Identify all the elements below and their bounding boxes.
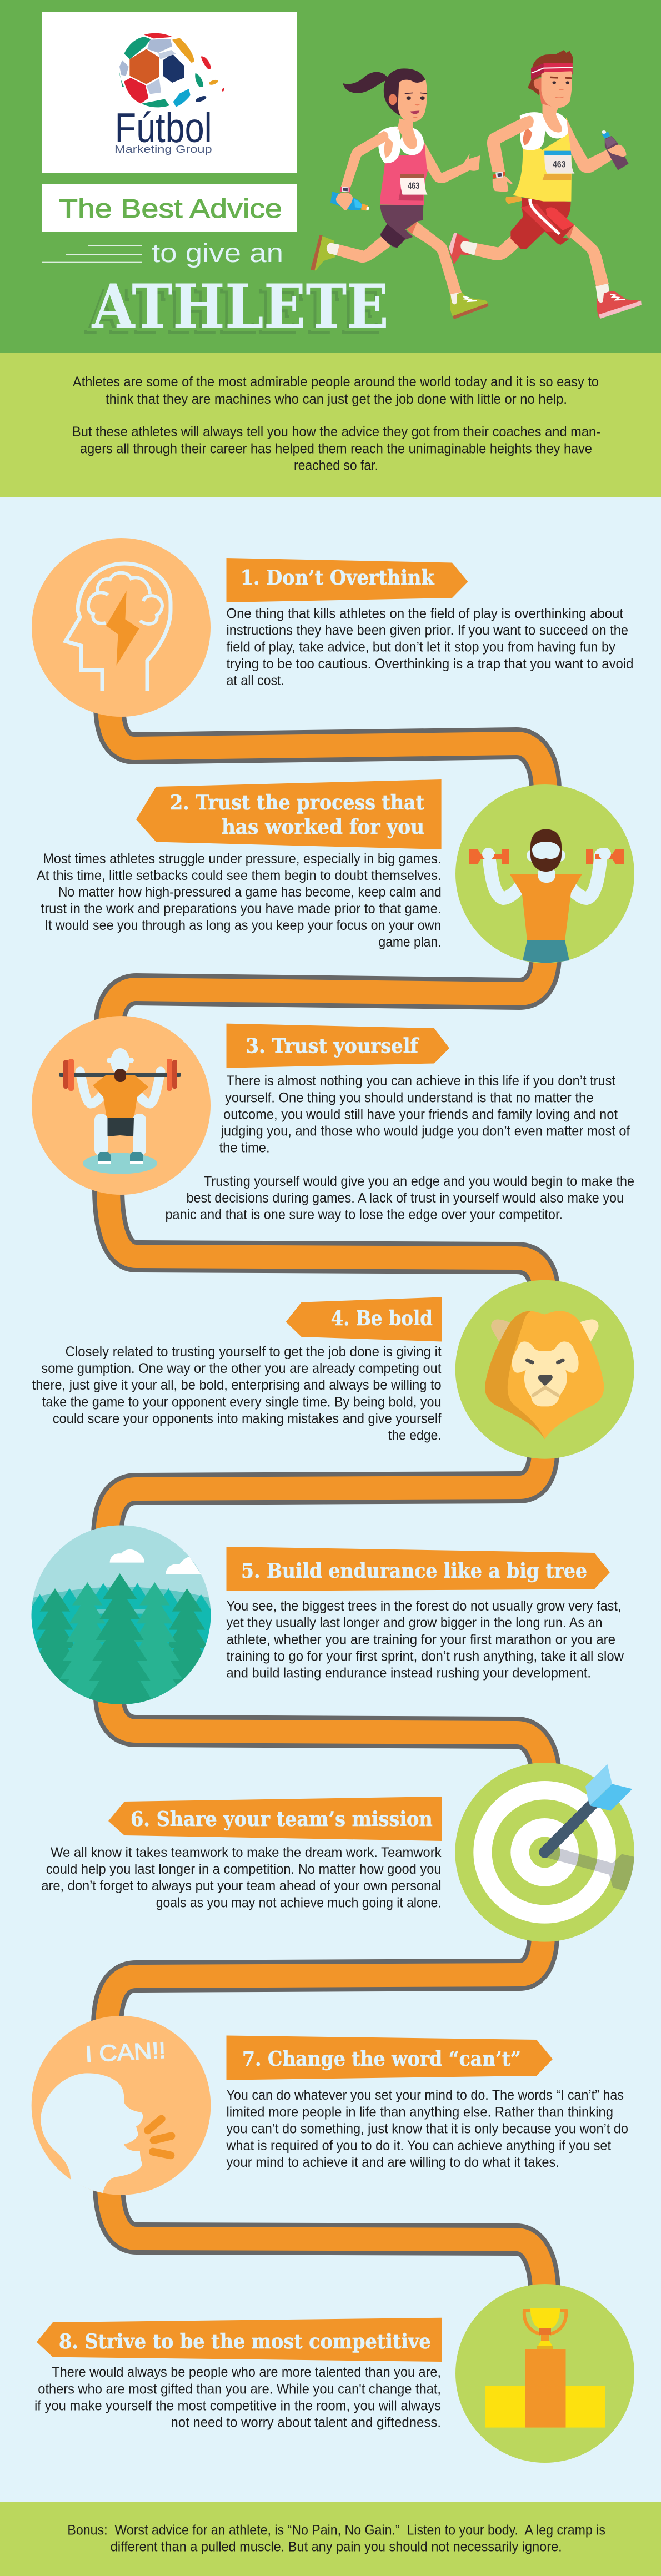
body text 7: You can do whatever you set your mind to do. The words “I can’t” has [227,2087,624,2103]
section 3 [166,1024,634,1222]
bonus panel: different than a pulled muscle. But any pain you should not necessarily ignore. [111,2539,562,2555]
banner: Share your team's mission [108,1797,442,1841]
body text 1: at all cost. [227,673,284,688]
icon: brain [32,538,211,717]
banner: Trust yourself [227,1024,449,1068]
body text 7: what is required of you to do it. You can achieve anything if you set [226,2138,611,2154]
body text 7: your mind to achieve it and are willing to do what it takes. [227,2155,559,2170]
banner: Share your team's mission: 6. Share your team’s mission [131,1808,433,1831]
banner: Trust the process: has worked for you [222,816,424,839]
banner: Don't Overthink: 1. Don’t Overthink [241,566,435,590]
banner: Don't Overthink [227,558,468,602]
body text 5: and build lasting endurance instead rushing your development. [227,1666,591,1681]
section 8 [34,2318,442,2431]
body text 5: You see, the biggest trees in the forest do not usually grow very fast, [227,1598,621,1614]
icon: dumbbell man [455,784,634,963]
title line: ATHLETE: ATHLETE [87,274,384,346]
body text 6: We all know it takes teamwork to make the dream work. Teamwork [51,1845,442,1860]
body text 6 [41,1845,442,1910]
section 1 [227,558,633,688]
logo card: Fútbol [115,104,212,151]
runner: man [449,50,642,319]
body text 3: There is almost nothing you can achieve in this life if you don’t trust [227,1073,615,1089]
body text 5: yet they usually last longer and grow bigger in the long run. As an [227,1615,602,1631]
body text 4: could scare your opponents into making mistakes and give yourself [53,1411,442,1427]
body text 3: yourself. One thing you should understand is that no matter the [225,1090,593,1105]
banner: Build endurance: 5. Build endurance like a big tree [241,1559,587,1583]
body text 1: One thing that kills athletes on the field of play is overthinking about [227,606,623,622]
runner: woman: 463 [408,180,419,191]
body text 3: Trusting yourself would give you an edge and you would begin to make the [204,1174,634,1189]
section 7 [226,2035,628,2170]
runner: man: 463 [553,159,566,169]
title line: The Best Advice: The Best Advice [59,194,282,224]
body text 6: are, don’t forget to always put your team ahead of your own personal [41,1878,442,1894]
body text 5 [227,1598,624,1681]
body text 5: training to go for your first sprint, don’t rush anything, take it all slow [227,1649,624,1664]
banner: Build endurance [227,1547,610,1591]
body text 7: you can’t do something, just know that it is only because you won’t do [227,2121,628,2136]
body text 4: Closely related to trusting yourself to get the job done is giving it [66,1344,442,1360]
title line: The Best Advice [42,184,297,232]
intro panel: reached so far. [294,457,378,473]
connector path 1 to 2 [109,705,545,791]
body text 3 [166,1073,634,1222]
banner: Trust the process [136,779,442,849]
connector path 7 to 8 [109,2185,544,2293]
intro panel: Athletes are some of the most admirable people around the world today and it is so easy to [73,374,599,390]
logo card [42,12,297,173]
banner: Change the word can't: 7. Change the word “can’t” [242,2047,521,2071]
connector path 6 to 7 [107,1935,543,2024]
connector path 5 to 6 [109,1696,545,1774]
title line: to give an [42,239,283,268]
body text 4: there, just give it your all, be bold, enterprising and always be willing to [32,1377,442,1393]
page background [0,497,661,2502]
icon: forest [31,1525,211,1704]
body text 7: limited more people in life than anything else. Rather than thinking [227,2104,613,2120]
section 2 [37,779,442,950]
title line: to give an: to give an [152,239,283,268]
runners illustration [311,50,642,319]
body text 4 [32,1344,442,1443]
body text 4: take the game to your opponent every single time. By being bold, you [42,1394,442,1410]
body text 1: instructions they have been given prior. If you want to succeed on the [227,623,628,638]
body text 4: the edge. [388,1428,442,1443]
connector path 2 to 3 [110,955,545,1024]
body text 3: panic and that is one sure way to lose the edge over your competitor. [166,1207,563,1222]
intro panel [0,353,661,497]
intro panel: agers all through their career has helped them reach the unimaginable heights they have [80,441,592,456]
banner: Trust yourself: 3. Trust yourself [246,1035,419,1058]
icon: speaking head [32,2016,211,2195]
runner: woman [311,68,488,319]
body text 8: others who are most gifted than you are. While you can't change that, [38,2381,441,2397]
icon: lion [455,1280,634,1459]
logo card: Marketing Group [114,143,212,155]
body text 8: not need to worry about talent and giftedness. [171,2415,441,2431]
bonus panel [0,2502,661,2576]
intro panel: But these athletes will always tell you how the advice they got from their coaches and man- [72,424,600,440]
body text 3: best decisions during games. A lack of trust in yourself would also make you [187,1190,624,1206]
body text 5: athlete, whether you are training for your first marathon or you are [227,1632,615,1647]
header panel [0,0,661,353]
banner: Strive to be the most competitive: 8. Strive to be the most competitive [59,2330,431,2353]
section 4 [32,1297,442,1443]
connector path 4 to 5 [107,1452,543,1535]
body text 2: It would see you through as long as you keep your focus on your own [44,918,441,933]
body text 2 [37,851,442,950]
body text 4: some gumption. One way or the other you are already competing out [41,1361,441,1376]
body text 3: the time. [219,1140,270,1156]
banner: Be bold [286,1297,442,1341]
body text 8: There would always be people who are more talented than you are, [52,2364,441,2380]
body text 2: Most times athletes struggle under pressure, especially in big games. [43,851,441,867]
body text 2: game plan. [379,934,441,950]
body text 8: if you make yourself the most competitive in the room, you will always [34,2398,441,2414]
body text 2: No matter how high-pressured a game has become, keep calm and [58,884,442,900]
body text 1 [227,606,633,688]
icon: speaking head: I CAN!! [84,2037,166,2067]
body text 1: field of play, take advice, but don’t let it stop you from having fun by [227,640,615,655]
body text 6: could help you last longer in a competition. No matter how good you [46,1861,442,1877]
banner: Be bold: 4. Be bold [331,1307,433,1330]
icon: trophy podium [455,2284,634,2463]
intro panel: think that they are machines who can just get the job done with little or no help. [106,391,567,407]
body text 6: goals as you may not achieve much going it alone. [156,1895,442,1910]
title line: ATHLETE: ATHLETE [84,276,382,349]
body text 3: outcome, you would still have your friends and family loving and not [223,1107,618,1123]
connector path 3 to 4 [108,1188,544,1291]
title line: ATHLETE: ATHLETE [92,271,389,342]
icon: weightlifter [32,1016,211,1195]
section 5 [227,1547,624,1681]
banner: Trust the process: 2. Trust the process that [170,791,424,814]
section 6 [41,1797,442,1910]
bonus panel: Bonus: Worst advice for an athlete, is “No Pain, No Gain.” Listen to your body. A leg cramp is [67,2523,605,2538]
banner: Change the word can't [227,2035,553,2080]
body text 1: trying to be too cautious. Overthinking is a trap that you want to avoid [227,656,633,672]
body text 2: At this time, little setbacks could see them begin to doubt themselves. [37,868,441,883]
body text 2: trust in the work and preparations you have made prior to that game. [41,901,442,917]
body text 3: judging you, and those who would judge you don’t even matter most of [221,1124,630,1139]
body text 7 [226,2087,628,2170]
banner: Strive to be the most competitive [37,2318,442,2362]
icon: target and arrow [455,1763,635,1942]
body text 8 [34,2364,441,2431]
